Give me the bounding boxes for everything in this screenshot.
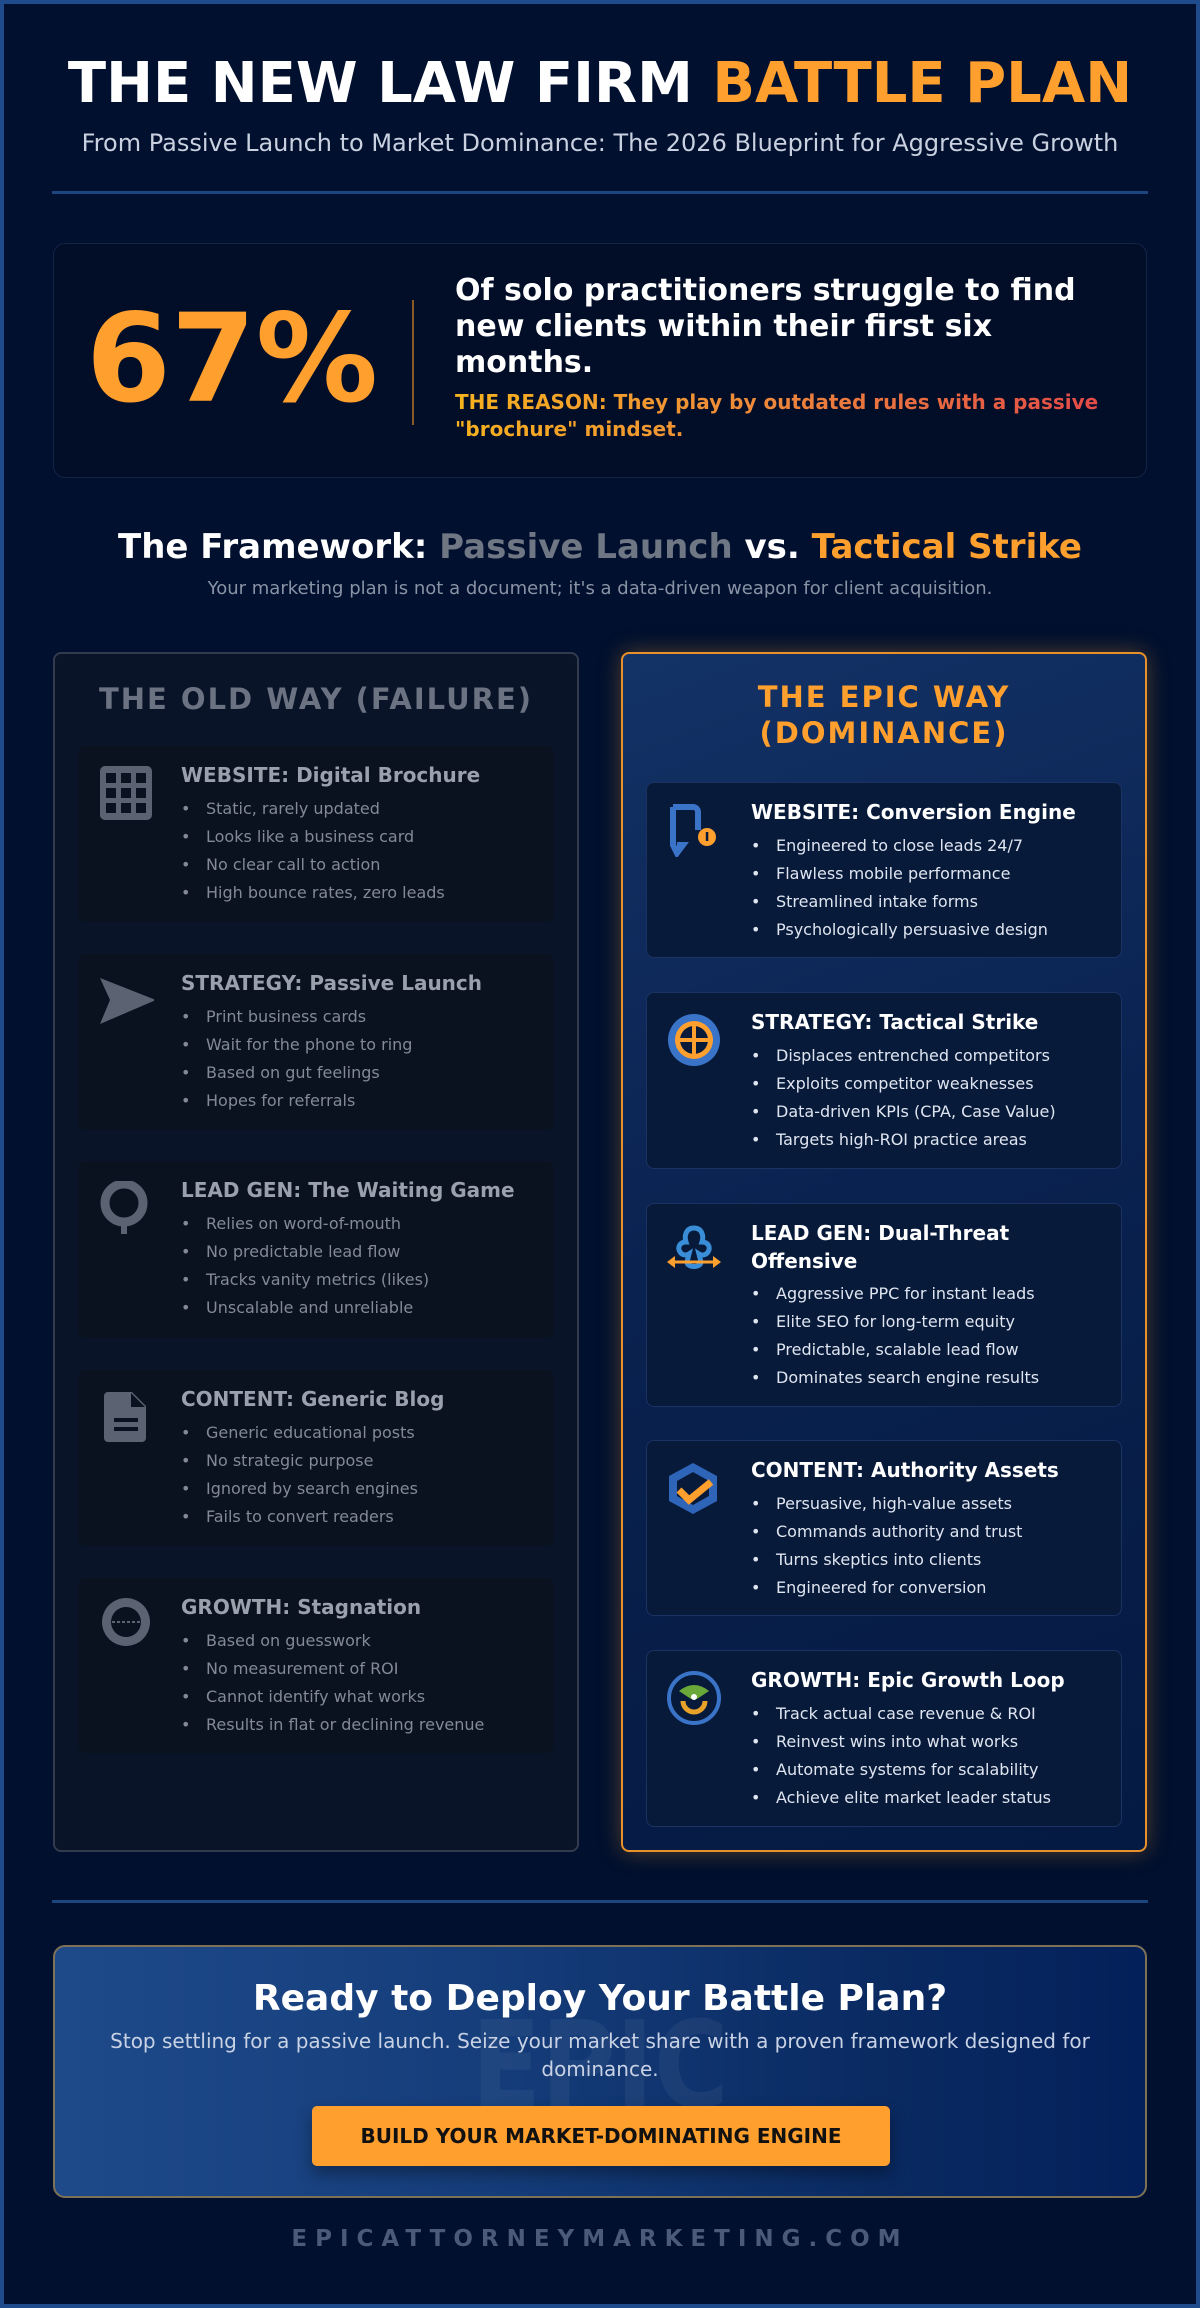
card: new content: CONTENT: Authority Assets bbox=[751, 1458, 1059, 1482]
card: new lead gen: Predictable, scalable lead flow bbox=[776, 1340, 1019, 1359]
card: old content: No strategic purpose bbox=[206, 1451, 373, 1470]
card: new website: Flawless mobile performance bbox=[776, 864, 1010, 883]
card: old growth: No measurement of ROI bbox=[206, 1659, 398, 1678]
card: new strategy: STRATEGY: Tactical Strike bbox=[751, 1010, 1038, 1034]
card: old growth: Based on guesswork bbox=[206, 1631, 371, 1650]
icon: growth loop bbox=[667, 1671, 721, 1725]
card: new strategy: Displaces entrenched competitors bbox=[776, 1046, 1050, 1065]
watermark: EPIC bbox=[471, 1997, 729, 2136]
card: old website bbox=[78, 746, 554, 922]
heading: epic way: (DOMINANCE) bbox=[760, 716, 1008, 750]
card: new lead gen bbox=[646, 1203, 1122, 1407]
card: new website: WEBSITE: Conversion Engine bbox=[751, 800, 1076, 824]
panel: call to action bbox=[53, 1945, 1147, 2198]
card: old website: High bounce rates, zero leads bbox=[206, 883, 445, 902]
card: new website: Engineered to close leads 24/7 bbox=[776, 836, 1023, 855]
card: new strategy: Exploits competitor weaknesses bbox=[776, 1074, 1034, 1093]
card: old content bbox=[78, 1370, 554, 1546]
stat text: THE REASON: They play by outdated rules with a passive "brochure" mindset. bbox=[455, 390, 1098, 441]
icon: document bbox=[104, 1392, 146, 1442]
card: old growth: Results in flat or declining revenue bbox=[206, 1715, 484, 1734]
card: new content: Persuasive, high-value assets bbox=[776, 1494, 1012, 1513]
card: old strategy: Print business cards bbox=[206, 1007, 366, 1026]
heading: epic way: THE EPIC WAY bbox=[758, 680, 1010, 714]
card: new content: Engineered for conversion bbox=[776, 1578, 986, 1597]
icon: dual arrow bbox=[667, 1226, 721, 1269]
card: old website: WEBSITE: Digital Brochure bbox=[181, 763, 480, 787]
card: old lead gen: Relies on word-of-mouth bbox=[206, 1214, 401, 1233]
card: new growth: Reinvest wins into what works bbox=[776, 1732, 1018, 1751]
card: new website bbox=[646, 782, 1122, 958]
card: new content: Commands authority and trust bbox=[776, 1522, 1022, 1541]
card: old website: Looks like a business card bbox=[206, 827, 414, 846]
card: new website: Streamlined intake forms bbox=[776, 892, 978, 911]
card: old strategy: Based on gut feelings bbox=[206, 1063, 380, 1082]
card: new content bbox=[646, 1440, 1122, 1616]
card: new growth: Automate systems for scalability bbox=[776, 1760, 1039, 1779]
card: new strategy bbox=[646, 992, 1122, 1169]
card: old content: Ignored by search engines bbox=[206, 1479, 418, 1498]
icon: shield check bbox=[669, 1463, 717, 1514]
card: old lead gen bbox=[78, 1161, 554, 1338]
card: old growth: Cannot identify what works bbox=[206, 1687, 425, 1706]
icon: grid bbox=[100, 766, 152, 820]
card: old lead gen: Tracks vanity metrics (likes) bbox=[206, 1270, 429, 1289]
card: new website: Psychologically persuasive design bbox=[776, 920, 1048, 939]
card: new strategy: Data-driven KPIs (CPA, Case Value) bbox=[776, 1102, 1056, 1121]
card: new growth: Achieve elite market leader status bbox=[776, 1788, 1051, 1807]
card: new content: Turns skeptics into clients bbox=[776, 1550, 981, 1569]
card: new growth bbox=[646, 1650, 1122, 1827]
card: old lead gen: Unscalable and unreliable bbox=[206, 1298, 413, 1317]
card: new growth: Track actual case revenue & ROI bbox=[776, 1704, 1036, 1723]
card: new lead gen: Dominates search engine results bbox=[776, 1368, 1039, 1387]
panel: epic way bbox=[621, 652, 1147, 1852]
card: old growth bbox=[78, 1578, 554, 1753]
cta heading: Ready to Deploy Your Battle Plan? bbox=[253, 1978, 947, 2019]
card: old strategy bbox=[78, 954, 554, 1130]
card: old content: Generic educational posts bbox=[206, 1423, 415, 1442]
heading: old way: THE OLD WAY (FAILURE) bbox=[99, 682, 533, 716]
cta text: Stop settling for a passive launch. Seize your market share with a proven framework designed for dominance. bbox=[110, 2029, 1090, 2081]
card: old lead gen: No predictable lead flow bbox=[206, 1242, 400, 1261]
footer url: EPICATTORNEYMARKETING.COM bbox=[291, 2226, 909, 2252]
card: new lead gen: Aggressive PPC for instant leads bbox=[776, 1284, 1035, 1303]
cta button bbox=[312, 2106, 890, 2166]
card: new strategy: Targets high-ROI practice areas bbox=[776, 1130, 1027, 1149]
icon: paper plane bbox=[100, 978, 154, 1024]
card: old content: Fails to convert readers bbox=[206, 1507, 394, 1526]
icon: ring bbox=[100, 1181, 148, 1234]
card: new lead gen: LEAD GEN: Dual-Threat bbox=[751, 1221, 1009, 1245]
card: new lead gen: Offensive bbox=[751, 1249, 857, 1273]
title: THE NEW LAW FIRM BATTLE PLAN bbox=[68, 51, 1132, 116]
card: old strategy: Hopes for referrals bbox=[206, 1091, 355, 1110]
card: new growth: GROWTH: Epic Growth Loop bbox=[751, 1668, 1065, 1692]
card: old strategy: STRATEGY: Passive Launch bbox=[181, 971, 482, 995]
subtitle: From Passive Launch to Market Dominance: The 2026 Blueprint for Aggressive Growth bbox=[82, 129, 1118, 157]
framework subtitle: Your marketing plan is not a document; it's a data-driven weapon for client acquisition. bbox=[208, 578, 992, 599]
card: new lead gen: Elite SEO for long-term equity bbox=[776, 1312, 1015, 1331]
icon: flat circle bbox=[102, 1598, 150, 1646]
stat text bbox=[455, 273, 1098, 441]
panel: old way bbox=[53, 652, 579, 1852]
card: old lead gen: LEAD GEN: The Waiting Game bbox=[181, 1178, 515, 1202]
stat number: 67% bbox=[86, 288, 378, 430]
card: old strategy: Wait for the phone to ring bbox=[206, 1035, 412, 1054]
card: old growth: GROWTH: Stagnation bbox=[181, 1595, 421, 1619]
framework heading: The Framework: Passive Launch vs. Tactical Strike bbox=[118, 527, 1082, 567]
icon: mobile bbox=[670, 804, 716, 857]
card: old website: No clear call to action bbox=[206, 855, 380, 874]
cta button: BUILD YOUR MARKET-DOMINATING ENGINE bbox=[360, 2124, 842, 2148]
panel: stat bbox=[53, 243, 1147, 478]
stat text: Of solo practitioners struggle to find new clients within their first six months. bbox=[455, 273, 1076, 380]
icon: crosshair bbox=[668, 1014, 720, 1066]
card: old website: Static, rarely updated bbox=[206, 799, 380, 818]
card: old content: CONTENT: Generic Blog bbox=[181, 1387, 444, 1411]
heading: epic way bbox=[758, 680, 1010, 750]
